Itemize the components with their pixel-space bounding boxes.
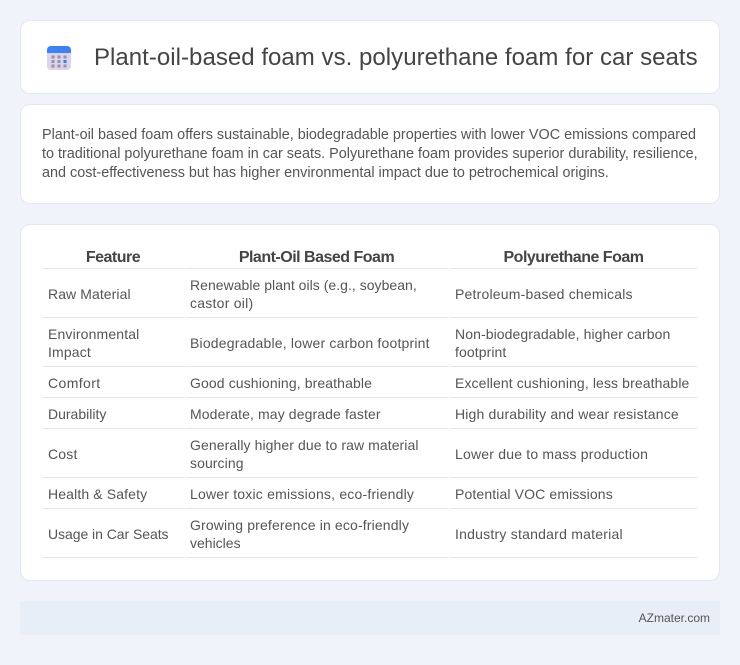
row: comfort: Excellent cushioning, less breathable xyxy=(455,375,689,391)
row: environmental impact: Non-biodegradable, higher carbon xyxy=(455,326,670,342)
row: usage in car seats: Industry standard material xyxy=(455,526,623,542)
row: raw material: Raw Material xyxy=(48,286,131,302)
header panel xyxy=(20,20,720,94)
row: raw material: Renewable plant oils (e.g., soybean, xyxy=(190,277,417,293)
icon: calendar xyxy=(47,46,71,70)
row: cost: sourcing xyxy=(190,455,244,471)
row: durability: Durability xyxy=(48,406,106,422)
row: usage in car seats xyxy=(48,517,623,551)
row: health and safety xyxy=(48,486,613,502)
row: comfort: Good cushioning, breathable xyxy=(190,375,372,391)
row: raw material xyxy=(48,277,633,311)
summary text: Plant-oil based foam offers sustainable, biodegradable properties with lower VOC emissions compared xyxy=(42,127,696,143)
summary text xyxy=(42,127,698,181)
row: durability: High durability and wear resistance xyxy=(455,406,679,422)
column heading: plant-oil: Plant-Oil Based Foam xyxy=(239,249,394,266)
column heading: polyurethane: Polyurethane Foam xyxy=(504,249,643,266)
row: environmental impact: Environmental xyxy=(48,326,139,342)
column heading: feature: Feature xyxy=(86,249,140,266)
row: usage in car seats: Usage in Car Seats xyxy=(48,526,168,542)
row: raw material: Petroleum-based chemicals xyxy=(455,286,633,302)
row: raw material: castor oil) xyxy=(190,295,253,311)
row: usage in car seats: vehicles xyxy=(190,535,241,551)
title: Plant-oil-based foam vs. polyurethane foam for car seats xyxy=(94,44,698,71)
row: cost xyxy=(48,437,648,471)
table panel xyxy=(20,224,720,581)
row: health and safety: Potential VOC emissions xyxy=(455,486,613,502)
row: comfort xyxy=(48,375,689,391)
summary text: to traditional polyurethane foam in car seats. Polyurethane foam provides superior durability, resilience, xyxy=(42,146,698,162)
row: cost: Cost xyxy=(48,446,78,462)
row: durability: Moderate, may degrade faster xyxy=(190,406,381,422)
row: health and safety: Lower toxic emissions, eco-friendly xyxy=(190,486,414,502)
row: comfort: Comfort xyxy=(48,375,101,391)
row: health and safety: Health & Safety xyxy=(48,486,147,502)
row: usage in car seats: Growing preference in eco-friendly xyxy=(190,517,409,533)
footer source text: AZmater.com xyxy=(639,611,710,625)
row: durability xyxy=(48,406,679,422)
row: cost: Lower due to mass production xyxy=(455,446,648,462)
row: environmental impact: footprint xyxy=(455,344,506,360)
row: environmental impact: Impact xyxy=(48,344,91,360)
summary panel xyxy=(20,104,720,204)
row: environmental impact xyxy=(48,326,670,360)
row: cost: Generally higher due to raw material xyxy=(190,437,419,453)
summary text: and cost-effectiveness but has higher environmental impact due to petrochemical origins. xyxy=(42,165,609,181)
footer bar xyxy=(20,601,720,635)
row: environmental impact: Biodegradable, lower carbon footprint xyxy=(190,335,430,351)
